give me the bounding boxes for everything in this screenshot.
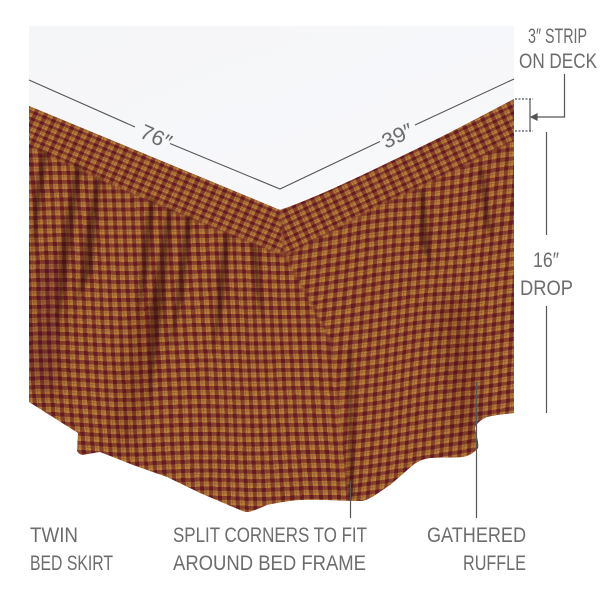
label: twin bed skirt bbox=[30, 524, 113, 575]
label: 16 inch drop: DROP bbox=[520, 277, 573, 300]
label: split corners: AROUND BED FRAME bbox=[173, 552, 366, 575]
left deck strip bbox=[29, 106, 286, 256]
label: 16 inch drop: 16″ bbox=[533, 249, 559, 272]
label: split corners: SPLIT CORNERS TO FIT bbox=[173, 524, 367, 547]
label: 76 inch: 76″ bbox=[137, 120, 176, 155]
callout lines: split corners and ruffle bbox=[350, 382, 476, 518]
label: split corners bbox=[173, 524, 367, 575]
label: twin bed skirt: TWIN bbox=[30, 524, 78, 547]
left skirt panel bbox=[29, 99, 514, 512]
label: 39 inch: 39″ bbox=[378, 119, 418, 154]
label: gathered ruffle: GATHERED bbox=[427, 524, 526, 547]
fold shading bbox=[32, 150, 492, 498]
dimension: 16 inch drop line bbox=[546, 132, 548, 413]
panel: plaid bed skirt photo bbox=[29, 80, 536, 512]
right deck strip bbox=[278, 99, 514, 256]
arrow: strip callout and bracket bbox=[515, 74, 564, 131]
soft tonal shading bbox=[32, 260, 480, 450]
label: 16 inch drop bbox=[520, 249, 573, 300]
panel: white bed deck sheet bbox=[29, 26, 514, 210]
label: 3 inch strip on deck bbox=[519, 25, 597, 73]
label: twin bed skirt: BED SKIRT bbox=[30, 552, 113, 575]
label: gathered ruffle: RUFFLE bbox=[463, 552, 526, 575]
right skirt panel bbox=[284, 138, 514, 501]
label: gathered ruffle bbox=[427, 524, 526, 575]
dimension: 76 inch length line bbox=[29, 79, 514, 189]
